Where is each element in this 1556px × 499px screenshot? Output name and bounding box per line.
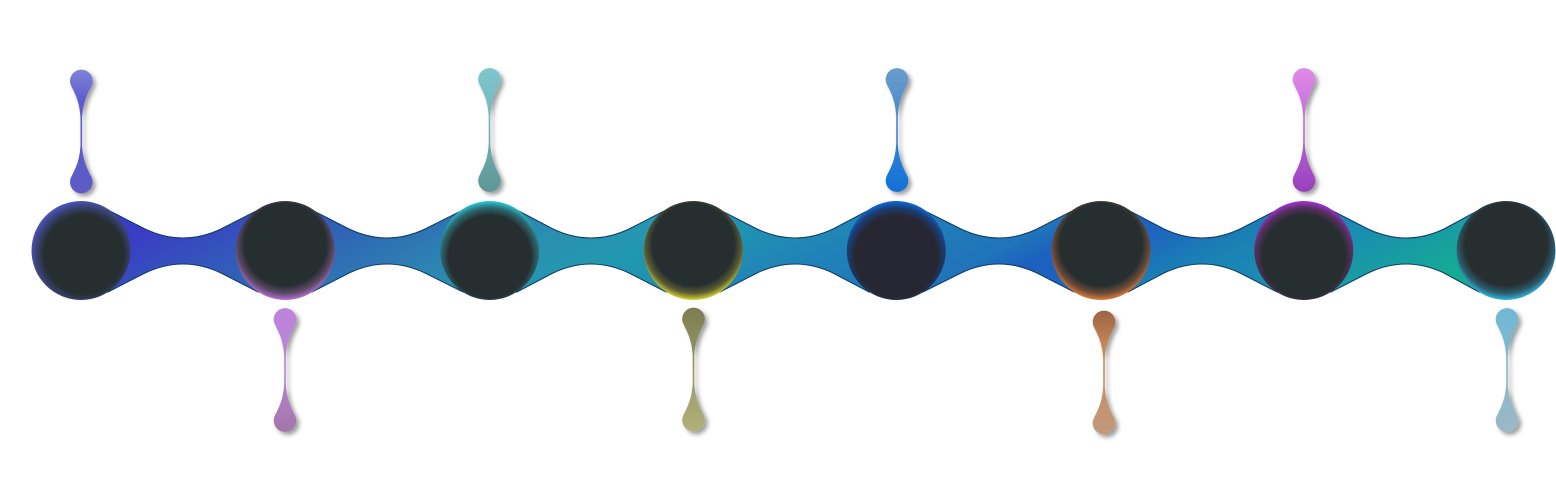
node 7 circle bbox=[1254, 201, 1353, 300]
pin 2 bbox=[274, 308, 296, 432]
pin 8 bbox=[1496, 308, 1518, 432]
connecting wavy band bbox=[108, 210, 1479, 292]
node 3 circle bbox=[440, 201, 539, 300]
pin 5 bbox=[886, 68, 908, 192]
node 8 circle bbox=[1456, 201, 1556, 300]
node 6 circle bbox=[1052, 201, 1150, 300]
pin 6 bbox=[1093, 311, 1115, 434]
pin 3 bbox=[478, 68, 501, 192]
pin 4 bbox=[682, 308, 705, 431]
node 4 circle bbox=[644, 201, 743, 300]
node 5 circle bbox=[847, 201, 946, 300]
pin 7 bbox=[1293, 68, 1315, 192]
pin 1 bbox=[70, 70, 93, 193]
node 2 circle bbox=[236, 201, 335, 300]
node 1 circle bbox=[32, 201, 130, 300]
